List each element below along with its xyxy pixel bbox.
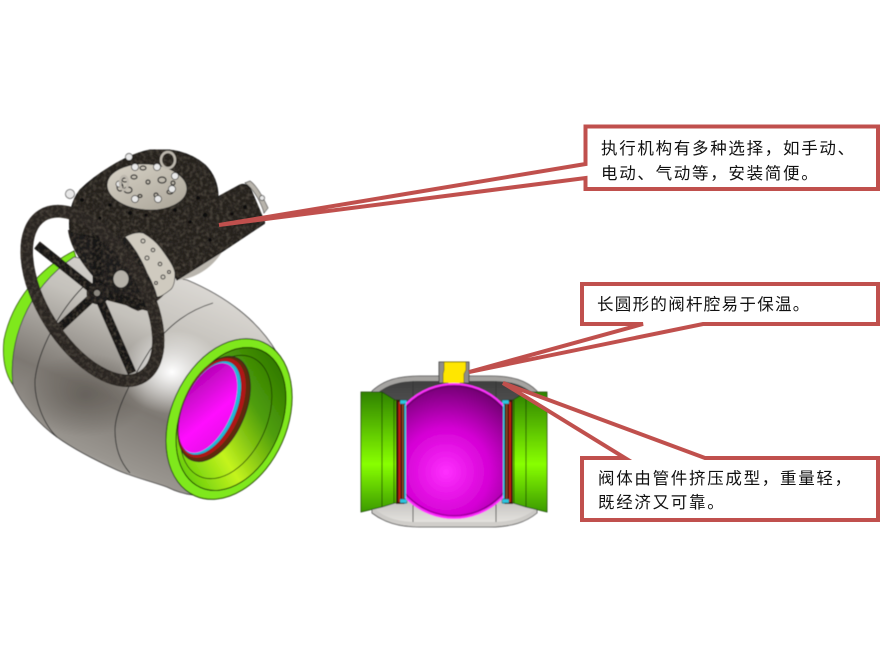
side cover holes — [141, 239, 170, 284]
seat rings — [163, 345, 265, 473]
magenta ball — [405, 382, 504, 520]
callout text: 阀体由管件挤压成型，重量轻， — [598, 469, 853, 488]
spokes — [37, 233, 150, 373]
ring bore — [155, 330, 307, 508]
hub nut — [94, 290, 100, 296]
callout text: 执行机构有多种选择，如手动、 — [601, 139, 856, 158]
callout text: 长圆形的阀杆腔易于保温。 — [597, 295, 811, 314]
right green end — [508, 392, 547, 512]
green step lines — [382, 392, 526, 507]
barrel dark shading — [23, 353, 147, 437]
callout: extruded pipe body — [503, 383, 878, 520]
right seat rings — [502, 400, 513, 504]
lower case behind wheel — [68, 230, 168, 311]
silver side cover — [125, 233, 175, 297]
callout box and pointer — [469, 284, 878, 372]
left green end — [361, 392, 400, 512]
inner step line — [162, 341, 290, 493]
illustration: 3D welded ball valve with gearbox — [0, 150, 316, 519]
handwheel — [0, 189, 185, 403]
left seat rings — [396, 400, 407, 504]
wheel rim — [0, 189, 185, 403]
callout: actuator options — [219, 126, 878, 225]
upper case and worm arm — [69, 150, 265, 280]
lifting eye bolts — [120, 152, 175, 190]
gearbox housing — [68, 150, 265, 311]
housing surface pits — [80, 196, 247, 242]
callout: oblong stem cavity — [469, 284, 878, 372]
silver underside — [177, 252, 222, 280]
outer shell — [372, 376, 537, 527]
callout box and pointer — [503, 383, 878, 520]
yellow stem — [443, 362, 466, 387]
worm shaft end cap — [245, 181, 268, 213]
callout: actuator options: 电动、气动等，安装简便。 — [601, 164, 819, 183]
barrel weld seams — [35, 287, 213, 473]
stem housing — [439, 362, 469, 383]
far green end ring — [3, 251, 76, 385]
gearbox — [66, 150, 268, 311]
top plate — [105, 161, 189, 213]
inner cavity — [376, 381, 534, 522]
plate holes and bolts — [117, 166, 175, 198]
near green end ring — [142, 319, 316, 519]
shaft collar — [113, 270, 129, 288]
callout box and pointer — [219, 126, 878, 225]
cavity rib lines — [413, 381, 496, 522]
illustration: valve cross-section — [361, 362, 547, 527]
hub — [87, 282, 109, 304]
callout: extruded pipe body: 既经济又可靠。 — [598, 493, 725, 512]
valve barrel body — [12, 257, 277, 495]
barrel highlight — [120, 330, 224, 414]
magenta ball — [167, 354, 249, 462]
